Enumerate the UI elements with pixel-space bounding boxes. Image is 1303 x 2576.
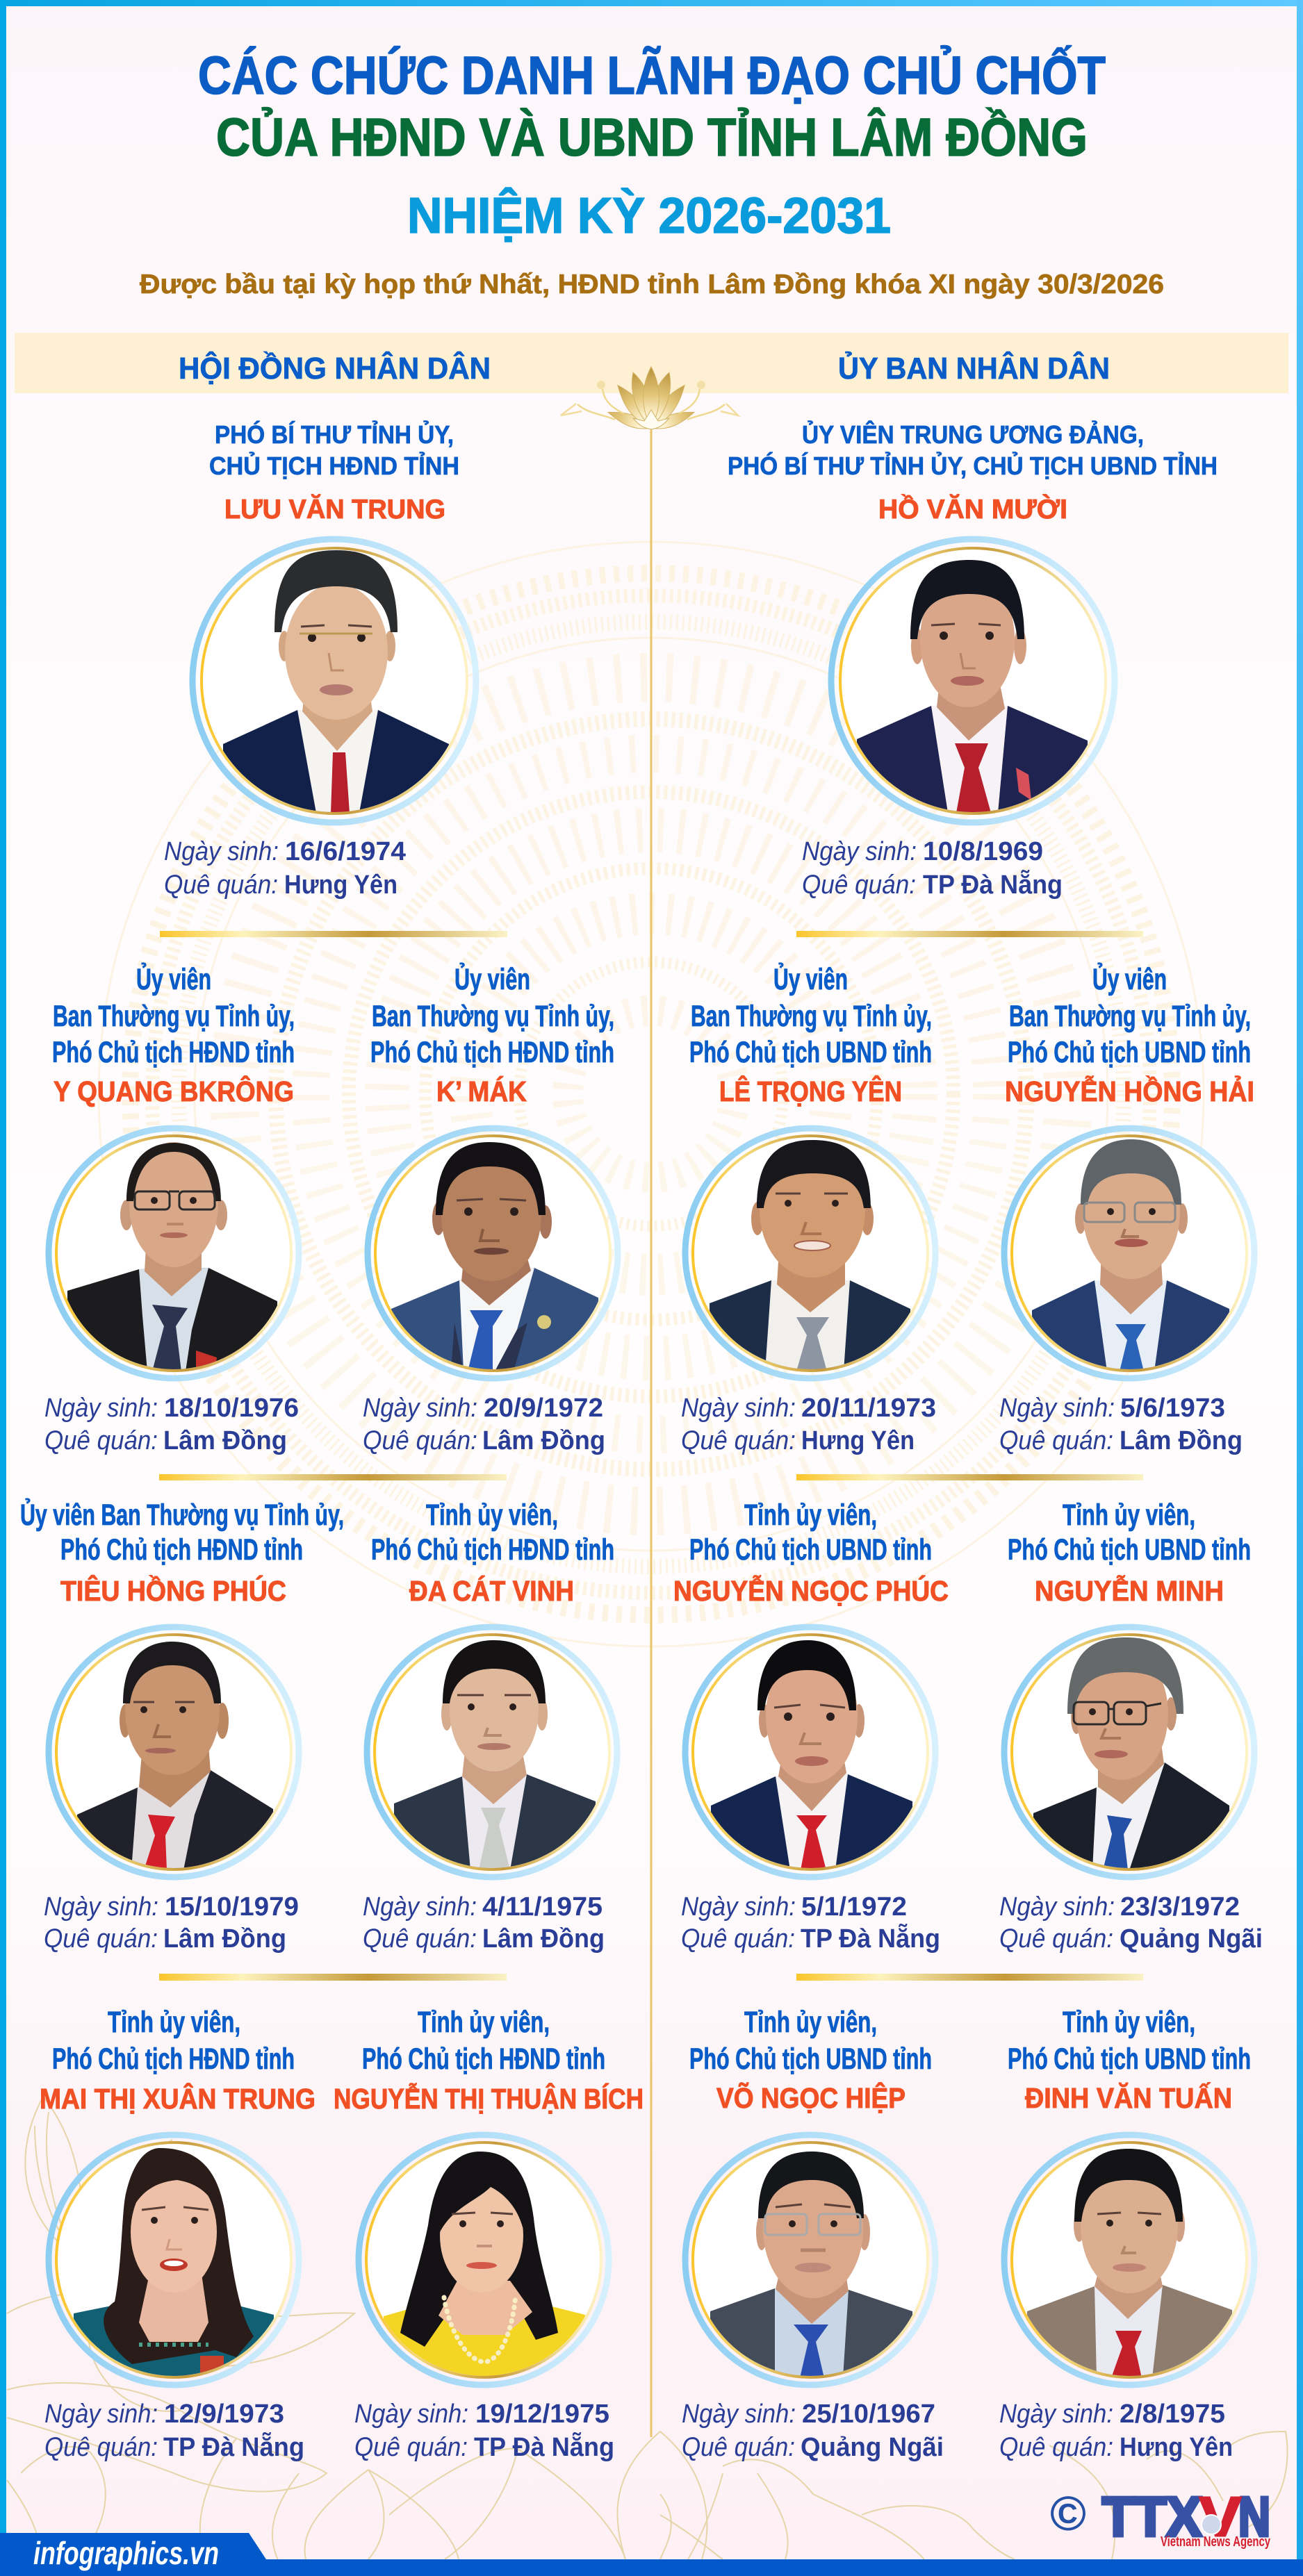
person: Mai Thị Xuân Trung bbox=[40, 2006, 315, 2462]
role bbox=[1008, 1498, 1251, 1567]
person: Võ Ngọc Hiệp bbox=[682, 2006, 944, 2462]
birth info: Ngày sinh: bbox=[44, 1892, 158, 1922]
role: Tỉnh ủy viên, bbox=[418, 2006, 550, 2039]
role bbox=[362, 2006, 605, 2076]
name: MAI THỊ XUÂN TRUNG bbox=[40, 2083, 315, 2115]
birth info: TP Đà Nẵng bbox=[163, 2431, 304, 2462]
subtitle: Được bầu tại kỳ họp thứ Nhất, HĐND tỉnh Lâm Đồng khóa XI ngày 30/3/2026 bbox=[140, 270, 1164, 299]
globe bbox=[1202, 2515, 1221, 2534]
portrait bbox=[685, 1128, 935, 1392]
birth info: 25/10/1967 bbox=[802, 2400, 935, 2429]
birth info: 5/1/1972 bbox=[801, 1892, 907, 1922]
person: Nguyễn Minh bbox=[999, 1498, 1263, 1954]
birth info: Ngày sinh: bbox=[681, 1394, 796, 1423]
person: K' Mák bbox=[363, 962, 618, 1455]
portrait bbox=[1004, 1128, 1254, 1392]
birth info: Quảng Ngãi bbox=[801, 2433, 944, 2462]
birth info bbox=[802, 837, 1063, 900]
birth info: Lâm Đồng bbox=[163, 1924, 286, 1954]
name: NGUYỄN HỒNG HẢI bbox=[1005, 1075, 1254, 1107]
role bbox=[370, 962, 614, 1069]
name: LƯU VĂN TRUNG bbox=[224, 494, 445, 525]
copyright mark: © bbox=[1050, 2486, 1086, 2541]
birth info: Ngày sinh: bbox=[363, 1394, 477, 1423]
birth info: Quê quán: bbox=[802, 870, 916, 900]
birth info bbox=[354, 2400, 614, 2462]
birth info: Ngày sinh: bbox=[999, 2400, 1113, 2429]
term: NHIỆM KỲ 2026-2031 bbox=[407, 188, 891, 244]
birth info: 12/9/1973 bbox=[164, 2400, 284, 2429]
birth info: TP Đà Nẵng bbox=[474, 2431, 614, 2462]
person: Tiêu Hồng Phúc bbox=[20, 1498, 344, 1954]
role: Tỉnh ủy viên, bbox=[1063, 2006, 1195, 2039]
birth info: Lâm Đồng bbox=[1120, 1426, 1243, 1455]
name: K’ MÁK bbox=[436, 1075, 527, 1107]
birth info: 20/11/1973 bbox=[801, 1394, 936, 1423]
portrait bbox=[1004, 1627, 1254, 1891]
role bbox=[728, 420, 1218, 480]
role: Ban Thường vụ Tỉnh ủy, bbox=[691, 1000, 932, 1033]
icon: lotus bbox=[561, 367, 738, 434]
person: Lưu Văn Trung bbox=[164, 420, 476, 900]
portrait bbox=[368, 1128, 618, 1392]
birth info: Ngày sinh: bbox=[363, 1892, 477, 1922]
birth info: Hưng Yên bbox=[801, 1426, 915, 1455]
role bbox=[52, 962, 295, 1069]
birth info: 2/8/1975 bbox=[1120, 2400, 1225, 2429]
role bbox=[689, 2006, 932, 2076]
birth info bbox=[999, 2400, 1233, 2462]
birth info: Hưng Yên bbox=[1120, 2433, 1233, 2462]
birth info: 19/12/1975 bbox=[475, 2400, 609, 2429]
birth info bbox=[999, 1394, 1243, 1455]
birth info: Quê quán: bbox=[44, 1426, 158, 1455]
role: Phó Chủ tịch HĐND tỉnh bbox=[52, 1036, 295, 1069]
birth info: Quê quán: bbox=[999, 1924, 1113, 1954]
role: Phó Chủ tịch HĐND tỉnh bbox=[362, 2042, 605, 2076]
TTX letters: TTX bbox=[1102, 2486, 1202, 2548]
logo: TTXVN bbox=[1050, 2486, 1271, 2550]
birth info: Quê quán: bbox=[999, 1426, 1113, 1455]
birth info: Lâm Đồng bbox=[163, 1426, 287, 1455]
role bbox=[1008, 2006, 1251, 2076]
birth info: Ngày sinh: bbox=[802, 837, 917, 866]
role: ỦY VIÊN TRUNG ƯƠNG ĐẢNG, bbox=[802, 420, 1144, 449]
name: TIÊU HỒNG PHÚC bbox=[60, 1575, 286, 1607]
background: bronze drum pattern bbox=[99, 542, 1204, 1646]
N letter: N bbox=[1238, 2486, 1270, 2548]
birth info: 15/10/1979 bbox=[165, 1892, 299, 1922]
birth info: Ngày sinh: bbox=[44, 2400, 158, 2429]
role: Phó Chủ tịch HĐND tỉnh bbox=[52, 2042, 295, 2076]
portrait bbox=[359, 2135, 609, 2399]
name: Y QUANG BKRÔNG bbox=[54, 1075, 294, 1107]
birth info: Hưng Yên bbox=[284, 870, 398, 900]
role bbox=[689, 1498, 932, 1567]
portrait bbox=[831, 539, 1115, 827]
portrait bbox=[685, 1627, 935, 1891]
role bbox=[20, 1498, 344, 1567]
birth info: 18/10/1976 bbox=[164, 1394, 299, 1423]
heading: HĐND: HỘI ĐỒNG NHÂN DÂN bbox=[179, 350, 491, 386]
name: ĐINH VĂN TUẤN bbox=[1025, 2082, 1232, 2114]
birth info bbox=[363, 1394, 605, 1455]
portrait bbox=[1004, 2135, 1254, 2399]
birth info: Ngày sinh: bbox=[681, 1892, 796, 1922]
birth info: Quê quán: bbox=[682, 2433, 795, 2462]
header band bbox=[15, 333, 1288, 393]
birth info: Quê quán: bbox=[44, 1924, 158, 1954]
birth info: Lâm Đồng bbox=[482, 1924, 605, 1954]
role: Ban Thường vụ Tỉnh ủy, bbox=[53, 1000, 295, 1033]
birth info bbox=[999, 1892, 1263, 1954]
birth info: 20/9/1972 bbox=[484, 1394, 603, 1423]
portrait bbox=[49, 1627, 299, 1891]
birth info: Quảng Ngãi bbox=[1120, 1924, 1263, 1954]
name: LÊ TRỌNG YÊN bbox=[719, 1075, 902, 1107]
person: Nguyễn Thị Thuận Bích bbox=[334, 2006, 644, 2462]
role bbox=[689, 962, 932, 1069]
role: Phó Chủ tịch HĐND tỉnh bbox=[370, 1036, 614, 1069]
V letter: V bbox=[1199, 2486, 1241, 2548]
role: Tỉnh ủy viên, bbox=[426, 1498, 558, 1532]
portrait bbox=[367, 1627, 617, 1891]
birth info: 16/6/1974 bbox=[285, 837, 406, 866]
birth info bbox=[681, 1394, 936, 1455]
name: HỒ VĂN MƯỜI bbox=[878, 494, 1067, 525]
role: Ủy viên bbox=[1092, 962, 1167, 996]
role: Phó Chủ tịch UBND tỉnh bbox=[689, 1533, 932, 1567]
birth info: 5/6/1973 bbox=[1120, 1394, 1225, 1423]
center divider line bbox=[650, 427, 652, 2437]
birth info: 10/8/1969 bbox=[923, 837, 1043, 866]
role: CHỦ TỊCH HĐND TỈNH bbox=[209, 451, 459, 480]
portrait bbox=[49, 1128, 299, 1392]
role: Tỉnh ủy viên, bbox=[744, 1498, 877, 1532]
birth info: Ngày sinh: bbox=[354, 2400, 468, 2429]
role bbox=[371, 1498, 614, 1567]
role bbox=[52, 2006, 295, 2076]
role: Phó Chủ tịch HĐND tỉnh bbox=[371, 1533, 614, 1567]
name: VÕ NGỌC HIỆP bbox=[716, 2082, 905, 2114]
footer site label: infographics.vn bbox=[33, 2535, 219, 2571]
name: ĐA CÁT VINH bbox=[409, 1575, 574, 1607]
birth info: Ngày sinh: bbox=[999, 1394, 1115, 1423]
birth info: Quê quán: bbox=[681, 1924, 795, 1954]
person: Đa Cát Vinh bbox=[363, 1498, 617, 1954]
portrait bbox=[49, 2135, 299, 2399]
birth info: Quê quán: bbox=[354, 2433, 468, 2462]
role: Phó Chủ tịch UBND tỉnh bbox=[689, 1036, 932, 1069]
birth info: Quê quán: bbox=[363, 1924, 477, 1954]
role: Ủy viên bbox=[773, 962, 848, 996]
birth info: Ngày sinh: bbox=[999, 1892, 1115, 1922]
role bbox=[1008, 962, 1251, 1069]
role: Tỉnh ủy viên, bbox=[108, 2006, 240, 2039]
person: Nguyễn Ngọc Phúc bbox=[673, 1498, 949, 1954]
person: Hồ Văn Mười bbox=[728, 420, 1218, 900]
birth info: Quê quán: bbox=[44, 2433, 158, 2462]
birth info bbox=[682, 2400, 944, 2462]
person: Nguyễn Hồng Hải bbox=[999, 962, 1254, 1455]
birth info bbox=[44, 2400, 304, 2462]
portrait bbox=[685, 2135, 935, 2399]
birth info: Lâm Đồng bbox=[482, 1426, 605, 1455]
title block bbox=[140, 45, 1164, 299]
birth info: 4/11/1975 bbox=[482, 1892, 603, 1922]
footer bar bbox=[0, 2533, 1303, 2576]
birth info: Quê quán: bbox=[164, 870, 278, 900]
divider row 1 bbox=[160, 931, 1143, 937]
birth info bbox=[164, 837, 406, 900]
name: NGUYỄN THỊ THUẬN BÍCH bbox=[334, 2083, 644, 2115]
role: Tỉnh ủy viên, bbox=[744, 2006, 877, 2039]
birth info: Quê quán: bbox=[363, 1426, 477, 1455]
birth info bbox=[363, 1892, 605, 1954]
birth info: Ngày sinh: bbox=[164, 837, 279, 866]
birth info: Quê quán: bbox=[999, 2433, 1113, 2462]
role: Phó Chủ tịch UBND tỉnh bbox=[689, 2042, 932, 2076]
birth info bbox=[44, 1394, 299, 1455]
role: Tỉnh ủy viên, bbox=[1063, 1498, 1195, 1532]
birth info: Ngày sinh: bbox=[44, 1394, 158, 1423]
role bbox=[209, 420, 459, 480]
birth info: TP Đà Nẵng bbox=[801, 1923, 940, 1954]
divider row 3 bbox=[159, 1974, 1143, 1981]
birth info bbox=[681, 1892, 940, 1954]
title line 2: CỦA HĐND VÀ UBND TỈNH LÂM ĐỒNG bbox=[216, 107, 1088, 167]
portrait bbox=[192, 539, 476, 827]
role: Ban Thường vụ Tỉnh ủy, bbox=[372, 1000, 614, 1033]
birth info: Ngày sinh: bbox=[682, 2400, 796, 2429]
role: PHÓ BÍ THƯ TỈNH ỦY, bbox=[215, 420, 454, 449]
person: Lê Trọng Yên bbox=[681, 962, 936, 1455]
heading: UBND: ỦY BAN NHÂN DÂN bbox=[838, 350, 1110, 386]
person: Đinh Văn Tuấn bbox=[999, 2006, 1254, 2462]
name: NGUYỄN MINH bbox=[1035, 1575, 1224, 1607]
birth info: Quê quán: bbox=[681, 1426, 796, 1455]
role: PHÓ BÍ THƯ TỈNH ỦY, CHỦ TỊCH UBND TỈNH bbox=[728, 451, 1218, 480]
role: Phó Chủ tịch HĐND tỉnh bbox=[60, 1533, 303, 1567]
birth info: 23/3/1972 bbox=[1120, 1892, 1240, 1922]
birth info: TP Đà Nẵng bbox=[923, 869, 1063, 900]
role: Ủy viên bbox=[454, 962, 530, 996]
birth info bbox=[44, 1892, 299, 1954]
name: NGUYỄN NGỌC PHÚC bbox=[673, 1575, 949, 1607]
role: Ủy viên bbox=[136, 962, 211, 996]
person: Y Quang Bkrông bbox=[44, 962, 299, 1455]
role: Ủy viên Ban Thường vụ Tỉnh ủy, bbox=[20, 1498, 344, 1532]
title line 1: CÁC CHỨC DANH LÃNH ĐẠO CHỦ CHỐT bbox=[198, 45, 1106, 106]
background: lotus line art bbox=[7, 2097, 1287, 2563]
divider row 2 bbox=[159, 1474, 1143, 1480]
